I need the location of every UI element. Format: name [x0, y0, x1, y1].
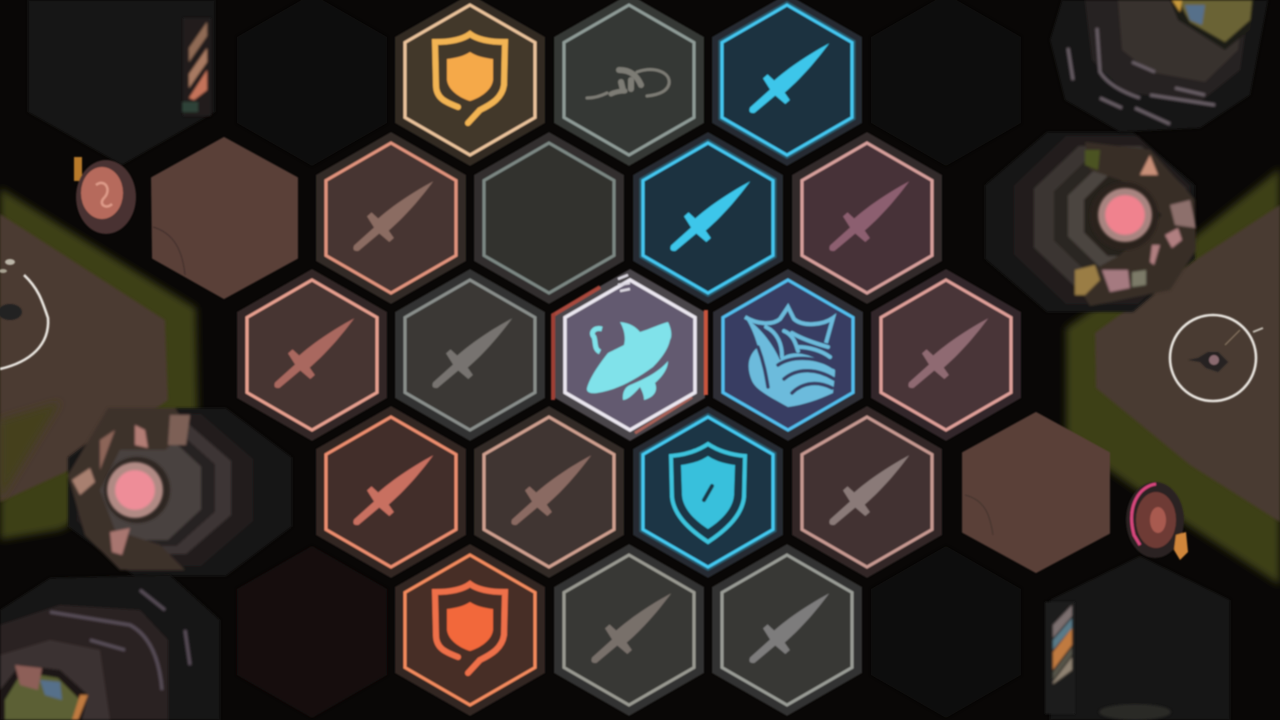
stone hex: left — [152, 138, 297, 298]
small pink node: bottom right — [1126, 482, 1188, 560]
hex: blue sword, top row — [712, 0, 862, 166]
stone hex: right — [963, 413, 1109, 572]
icon: orange-red shield — [435, 584, 505, 673]
icon: wind slash — [587, 322, 671, 400]
left floor — [0, 188, 198, 540]
pillar: bottom left — [0, 575, 220, 720]
striped post: bottom right — [1045, 602, 1075, 714]
hex: pink sword, row 2 — [792, 132, 942, 304]
hex: pink sword, row 3 — [871, 269, 1021, 441]
hex: dim coral sword, row 4 — [474, 406, 624, 578]
hex: coral sword, row 4 — [316, 406, 466, 578]
pillar: top right — [1050, 0, 1268, 132]
icon: blue shield — [671, 444, 745, 542]
hex: grey-pink sword, row 4 — [792, 406, 942, 578]
hex: grey sword, bottom row — [554, 544, 704, 716]
hex: coral sword, row 2 — [316, 132, 466, 304]
icon: sword — [739, 580, 840, 675]
icon: sword — [501, 442, 602, 537]
pillar: right — [985, 132, 1196, 312]
hex: blue wave shield, row 3 — [713, 269, 863, 441]
right floor — [1066, 168, 1280, 585]
icon: sword — [422, 305, 523, 400]
small pink node: top left — [74, 157, 136, 234]
hex: selected, centre — [553, 269, 706, 441]
icon: sword — [819, 168, 920, 263]
player ring: right — [1170, 315, 1263, 401]
icon: sword — [581, 580, 682, 675]
hex: blue shield, row 4 — [633, 406, 783, 578]
hex: orange shield, bottom row — [395, 544, 545, 716]
pillar glow: right — [1090, 182, 1158, 250]
hex: grey sword, row 3 — [395, 269, 545, 441]
hex: coral sword, row 3 — [237, 269, 387, 441]
hex: grey grapple, top row — [554, 0, 704, 166]
player ring: left — [0, 259, 48, 369]
hex: grey empty, row 2 — [474, 132, 624, 304]
icon: sword — [264, 305, 365, 400]
icon: sword — [660, 168, 761, 263]
hex: orange shield, top row — [395, 0, 545, 166]
dome: bottom right — [1099, 704, 1171, 720]
icon: orange shield — [435, 34, 505, 123]
pillar: left — [68, 408, 292, 576]
striped post: top left — [182, 18, 211, 116]
pillar glow: left — [104, 457, 170, 523]
icon: sword — [343, 168, 444, 263]
hex: grey sword, bottom row right — [712, 544, 862, 716]
icon: wave shield — [745, 307, 835, 407]
icon: grapple hook — [587, 70, 669, 98]
icon: sword — [819, 442, 920, 537]
icon: small marker — [618, 275, 630, 291]
icon: sword — [898, 305, 999, 400]
icon: sword — [343, 442, 444, 537]
icon: sword — [739, 30, 840, 125]
hex: blue sword, row 2 — [633, 132, 783, 304]
